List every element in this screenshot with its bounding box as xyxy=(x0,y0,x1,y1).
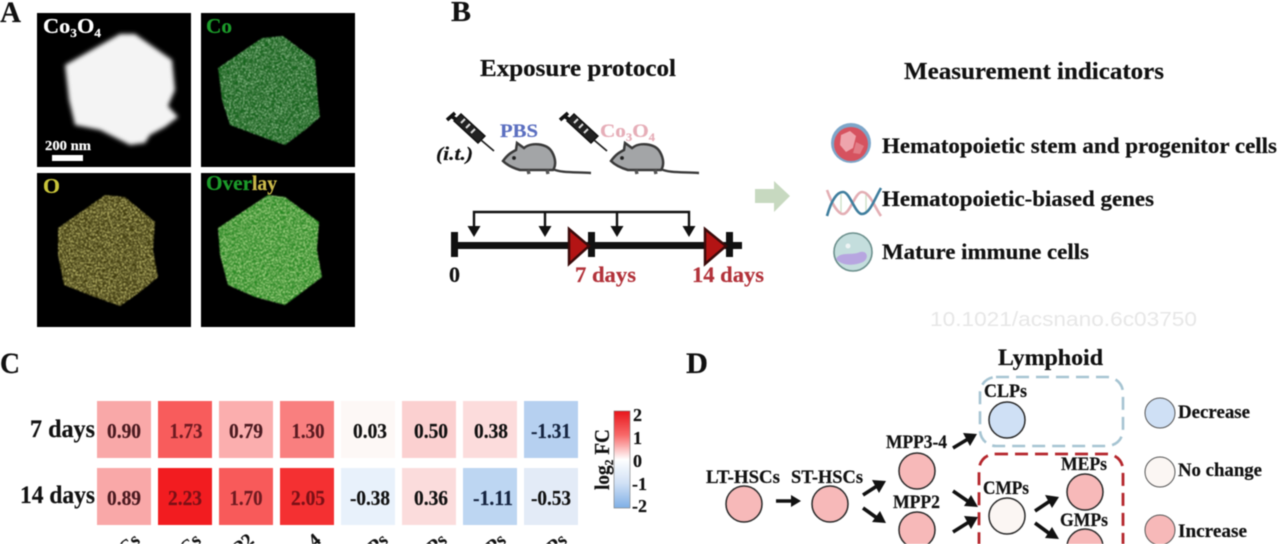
node: MPP3-4 xyxy=(899,453,935,489)
panel A: electron microscopy and element maps xyxy=(37,13,355,327)
label: LT-HSCs: LT-HSCs xyxy=(706,467,780,488)
arrow: protocol to indicators xyxy=(755,181,790,212)
row label: 14 days: 14 days xyxy=(20,482,95,509)
heatmap: 1.30 xyxy=(292,419,324,443)
group: myeloid box xyxy=(979,454,1123,544)
heatmap: 1.73 xyxy=(170,419,202,443)
node: LT-HSCs xyxy=(726,486,762,522)
heatmap xyxy=(20,401,578,544)
map: Overlay: lay xyxy=(252,171,277,195)
heading: Lymphoid: Lymphoid xyxy=(998,345,1103,370)
map: Overlay xyxy=(201,171,355,327)
legend: Decrease: Decrease xyxy=(1178,402,1250,423)
legend: Increase: Increase xyxy=(1178,521,1247,542)
label: Co3O4: Co₃O₄ xyxy=(600,121,655,142)
icon: mouse PBS xyxy=(503,143,591,174)
node: CMPs xyxy=(989,498,1025,534)
label: 14 days: 14 days xyxy=(692,262,764,287)
micrograph: Co3O4: Co₃O₄ xyxy=(43,14,102,38)
node: GMPs xyxy=(1067,529,1103,544)
node: MPP2 xyxy=(899,512,935,544)
heading: Exposure protocol: Exposure protocol xyxy=(480,56,676,82)
label: MEPs: MEPs xyxy=(1061,454,1107,475)
text: immune cells: Mature immune cells xyxy=(882,239,1089,264)
cell differentiation diagram xyxy=(706,345,1262,544)
icon: mouse Co3O4 xyxy=(611,143,699,174)
label: 7 days: 7 days xyxy=(575,262,636,287)
heatmap: -1.31 xyxy=(531,419,571,443)
heatmap: 0.38 xyxy=(474,419,508,443)
label: PBS: PBS xyxy=(500,121,538,142)
heatmap: -0.53 xyxy=(531,486,571,510)
label: ST-HSCs: ST-HSCs xyxy=(791,467,863,488)
map: Co xyxy=(201,13,355,167)
label: GMPs: GMPs xyxy=(1060,510,1108,531)
heatmap: -0.38 xyxy=(350,486,390,510)
heading: Measurement indicators: Measurement indicators xyxy=(904,59,1164,85)
micrograph: Co3O4: 200 nm xyxy=(45,139,91,154)
icon: syringe Co3O4 xyxy=(560,113,607,151)
legend: No change: No change xyxy=(1178,460,1262,481)
heatmap: 0.89 xyxy=(107,486,141,510)
heatmap: 1.70 xyxy=(230,486,262,510)
icon: stem cell xyxy=(831,123,871,163)
micrograph: Co3O4 xyxy=(37,13,191,167)
panel letter D: D xyxy=(686,347,708,380)
map: O: O xyxy=(43,174,60,198)
legend: Increase xyxy=(1145,515,1247,544)
marker: day 7 xyxy=(569,229,589,264)
heatmap: 0.90 xyxy=(107,419,141,443)
marker: day 14 xyxy=(705,229,726,264)
watermark: 10.1021/acsnano.6c03750 xyxy=(930,309,1197,331)
heatmap: 2.23 xyxy=(168,486,202,510)
map: Overlay: Over xyxy=(206,171,252,195)
label: 0: 0 xyxy=(449,262,460,287)
legend: Decrease xyxy=(1145,398,1250,428)
row label: 7 days: 7 days xyxy=(30,416,95,443)
heatmap: 2.05 xyxy=(291,486,325,510)
colour scale legend: -2 xyxy=(632,496,647,516)
panel letter C: C xyxy=(0,347,20,380)
map: O xyxy=(37,173,191,327)
icon: immune cell xyxy=(834,233,872,271)
icon: syringe PBS xyxy=(447,113,494,151)
arrows xyxy=(776,433,1059,539)
text: stem and progenitor cells: Hematopoietic stem and progenitor cells xyxy=(882,133,1277,158)
colour scale legend: 0 xyxy=(633,451,642,471)
label: i.t.: (i.t.) xyxy=(436,144,473,165)
text: biased genes: Hematopoietic-biased genes xyxy=(882,186,1154,211)
label: MPP2: MPP2 xyxy=(893,492,940,513)
icon: DNA helix xyxy=(827,188,881,216)
node: MEPs xyxy=(1067,474,1103,510)
label: CMPs: CMPs xyxy=(983,478,1029,499)
colour scale legend xyxy=(590,405,647,516)
node: ST-HSCs xyxy=(812,486,848,522)
colour scale legend: log₂ FC xyxy=(590,429,614,490)
map: Co: Co xyxy=(206,14,232,38)
heatmap: 0.36 xyxy=(414,486,448,510)
timeline xyxy=(449,212,764,287)
heatmap: 0.03 xyxy=(353,419,387,443)
label: MPP3-4: MPP3-4 xyxy=(886,432,947,453)
heatmap: 0.79 xyxy=(229,419,263,443)
colour scale legend: -1 xyxy=(632,474,647,494)
colour scale legend: 1 xyxy=(633,428,642,448)
colour scale legend: 2 xyxy=(633,405,642,425)
group: lymphoid box xyxy=(980,377,1123,446)
column labels xyxy=(74,529,571,544)
legend: No change xyxy=(1145,457,1262,487)
label: CLPs: CLPs xyxy=(984,381,1027,402)
heatmap: 0.50 xyxy=(414,419,448,443)
heatmap: -1.11 xyxy=(473,486,513,510)
node: CLPs xyxy=(989,402,1025,438)
injection bracket xyxy=(468,212,696,237)
